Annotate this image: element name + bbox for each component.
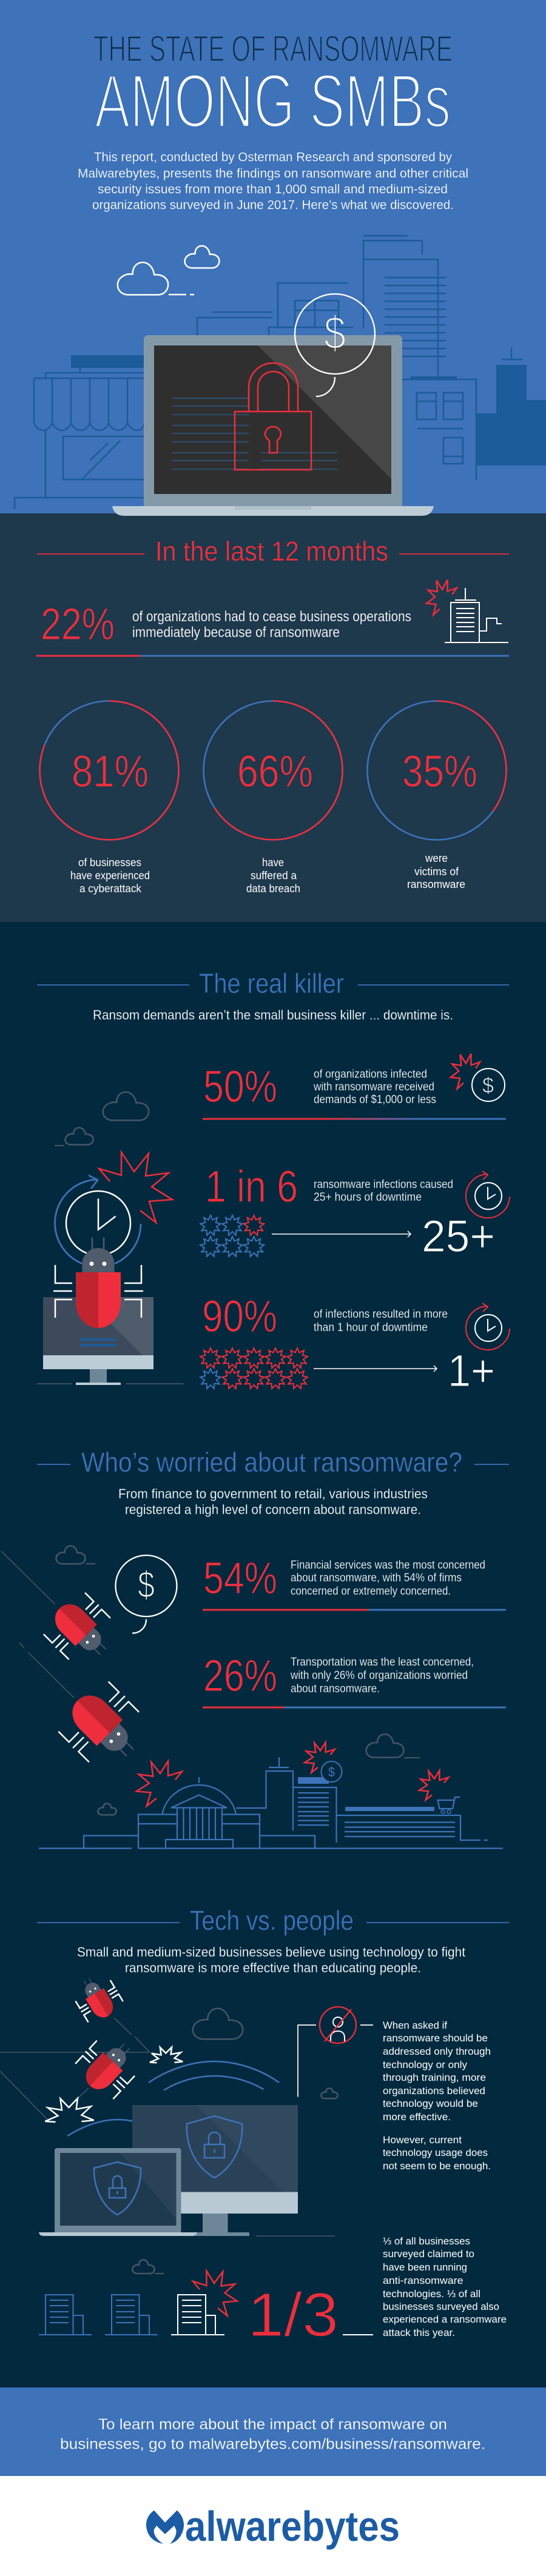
heading: in the last 12 months: In the last 12 months (155, 536, 388, 567)
stat: 22 percent ceased operations: of organizations had to cease business operations (132, 609, 411, 625)
panel: call to action (0, 2387, 546, 2476)
subheading: tech vs people: ransomware is more effective than educating people. (125, 1960, 421, 1975)
text: one third of businesses: attack this year. (383, 2327, 455, 2338)
donut: 66 percent (204, 701, 342, 840)
panel: call to action: businesses, go to malwarebytes.com/business/ransomware. (60, 2435, 485, 2452)
subheading: the real killer: Ransom demands aren’t the small business killer ... downtime is. (93, 1007, 453, 1023)
text: technology versus training: technology usage does (383, 2147, 488, 2158)
illustration: falling bugs and dollar: $ (138, 1564, 155, 1606)
illustration: clouds (118, 246, 219, 295)
illustration: bug on monitor with clock (37, 1092, 184, 1385)
text: technology versus training: through training, more (383, 2072, 486, 2083)
star row: 90 percent (200, 1348, 308, 1389)
stat: 50 percent (203, 1061, 436, 1112)
subheading: who's worried: From finance to government to retail, various industries (118, 1486, 428, 1501)
stat: 90 percent: than 1 hour of downtime (314, 1321, 428, 1334)
text: one third of businesses: experienced a ransomware (383, 2314, 507, 2325)
text: technology versus training: technology or only (383, 2059, 467, 2070)
intro paragraph: security issues from more than 1,000 small and medium-sized (98, 182, 448, 196)
caption: 35 percent: victims of (414, 866, 459, 878)
icon: burst and dollar coin (451, 1053, 505, 1101)
icon: padlock (235, 363, 311, 470)
caption: 35 percent: ransomware (407, 878, 465, 890)
icon: burst and dollar coin: $ (482, 1073, 494, 1098)
illustration: attack on monitor and laptop (0, 1969, 338, 2236)
stat: 1 in 6 (205, 1161, 453, 1212)
text: one third of businesses: technologies. ⅓ of all (383, 2288, 480, 2300)
stat: 22 percent ceased operations: 22% (41, 599, 115, 649)
stat: 90 percent: of infections resulted in more (314, 1308, 448, 1321)
text: one third of businesses: ⅓ of all businesses (383, 2235, 470, 2247)
heading: tech vs people: Tech vs. people (190, 1905, 354, 1936)
text: one third of businesses (383, 2235, 507, 2338)
progress bar: 22 percent (36, 655, 509, 657)
icon: crossed-out person (298, 2007, 373, 2097)
icon: clock, 25 hours (466, 1171, 510, 1218)
intro paragraph: Malwarebytes, presents the findings on ransomware and other critical (78, 167, 468, 181)
stat: 1 in 6: 1 in 6 (205, 1161, 298, 1212)
stat: 54 percent: Financial services was the most concerned (291, 1559, 485, 1572)
icon: building under attack (426, 579, 508, 642)
text: technology versus training: However, current (383, 2134, 462, 2146)
text: one third of businesses: have been running (383, 2261, 467, 2273)
subheading: tech vs people: Small and medium-sized businesses believe using technology to fight (77, 1944, 465, 1960)
caption: 81 percent: a cyberattack (79, 883, 142, 895)
caption: 81 percent: have experienced (70, 869, 150, 881)
stat: 26 percent (203, 1650, 506, 1708)
donut: 35 percent: 35% (402, 746, 477, 796)
stat: 90 percent: 90% (202, 1291, 277, 1341)
icon: dollar speech bubble: $ (324, 306, 346, 359)
text: technology versus training: When asked if (383, 2020, 447, 2031)
panel: in the last 12 months (0, 513, 546, 922)
text: one third of businesses: businesses surveyed also (383, 2301, 499, 2312)
panel: call to action: To learn more about the impact of ransomware on (98, 2416, 447, 2433)
stat: 25 plus: 25+ (422, 1211, 495, 1261)
text: technology versus training: organizations believed (383, 2085, 485, 2097)
subheading: tech vs people (77, 1944, 465, 1975)
stat: 1 in 6: ransomware infections caused (314, 1178, 453, 1191)
stat: 54 percent (203, 1553, 506, 1611)
panel: hero (0, 0, 546, 516)
illustration: laptop (112, 335, 434, 516)
stat: 1 plus: 1+ (448, 1346, 495, 1396)
caption: 81 percent (70, 856, 150, 895)
text: one third of businesses: anti-ransomware (383, 2275, 463, 2286)
text: technology versus training: addressed only through (383, 2046, 491, 2057)
panel: dark background sections (0, 922, 546, 2387)
text: one third of businesses: surveyed claimed to (383, 2248, 474, 2260)
stat: 54 percent: concerned or extremely concerned. (291, 1585, 451, 1598)
stat: 22 percent ceased operations: immediately because of ransomware (132, 624, 340, 641)
arrow: to 1 plus (314, 1366, 437, 1372)
text: technology versus training: technology would be (383, 2098, 478, 2109)
caption: 35 percent: were (425, 852, 448, 864)
arrow: to 25 plus (272, 1231, 411, 1237)
stat: 22 percent ceased operations (41, 599, 411, 649)
illustration: city under attack: $ (328, 1764, 335, 1780)
logo mark (146, 2511, 184, 2544)
heading: who's worried: Who’s worried about ransomware? (81, 1447, 462, 1478)
star row: 1 in 6 (200, 1215, 264, 1256)
donut: 35 percent (368, 701, 506, 840)
gradient bar (203, 1118, 506, 1120)
illustration: one in three buildings (39, 2260, 237, 2335)
logo wordmark: alwarebytes (185, 2503, 400, 2550)
stat: 26 percent: with only 26% of organizations worried (290, 1669, 468, 1682)
stat: 90 percent (202, 1291, 448, 1341)
panel: footer logo (0, 2476, 546, 2576)
text: technology versus training: not seem to be enough. (383, 2160, 491, 2172)
heading: the real killer: The real killer (199, 968, 344, 999)
donut: 66 percent: 66% (237, 746, 313, 796)
intro paragraph: organizations surveyed in June 2017. Here’s what we discovered. (92, 198, 454, 212)
stat: 26 percent: 26% (203, 1650, 277, 1701)
stat: 50 percent: demands of $1,000 or less (314, 1093, 436, 1106)
donut: 81 percent: 81% (72, 746, 149, 796)
illustration: falling bugs and dollar (1, 1546, 177, 1779)
caption: 81 percent: of businesses (78, 856, 141, 869)
stat: 50 percent: 50% (203, 1061, 277, 1112)
intro paragraph (78, 150, 468, 212)
caption: 66 percent: have (262, 856, 284, 869)
text: technology versus training: more effective. (383, 2111, 451, 2123)
stat: one third: 1/3 (248, 2280, 339, 2349)
caption: 35 percent (407, 852, 465, 890)
stat: 50 percent: with ransomware received (313, 1081, 434, 1093)
caption: 66 percent (246, 856, 300, 895)
caption: 66 percent: suffered a (251, 869, 297, 881)
icon: clock, 1 hour (466, 1303, 510, 1350)
stat: 54 percent: 54% (203, 1553, 277, 1603)
subheading: who's worried (118, 1486, 428, 1517)
stat: 26 percent: about ransomware. (291, 1683, 380, 1695)
icon: dollar speech bubble (295, 294, 375, 396)
subheading: who's worried: registered a high level of concern about ransomware. (125, 1502, 421, 1517)
illustration: city under attack (39, 1734, 503, 1849)
stat: 26 percent: Transportation was the least concerned, (291, 1656, 474, 1669)
text: technology versus training (383, 2020, 491, 2172)
text: technology versus training: ransomware should be (383, 2032, 488, 2044)
stat: 1 in 6: 25+ hours of downtime (314, 1191, 422, 1204)
stat: 54 percent: about ransomware, with 54% of firms (291, 1572, 462, 1584)
illustration: background skyline (15, 236, 546, 509)
caption: 66 percent: data breach (246, 883, 300, 895)
intro paragraph: This report, conducted by Osterman Research and sponsored by (94, 150, 452, 164)
stat: 50 percent: of organizations infected (314, 1068, 427, 1081)
donut: 81 percent (40, 701, 178, 840)
